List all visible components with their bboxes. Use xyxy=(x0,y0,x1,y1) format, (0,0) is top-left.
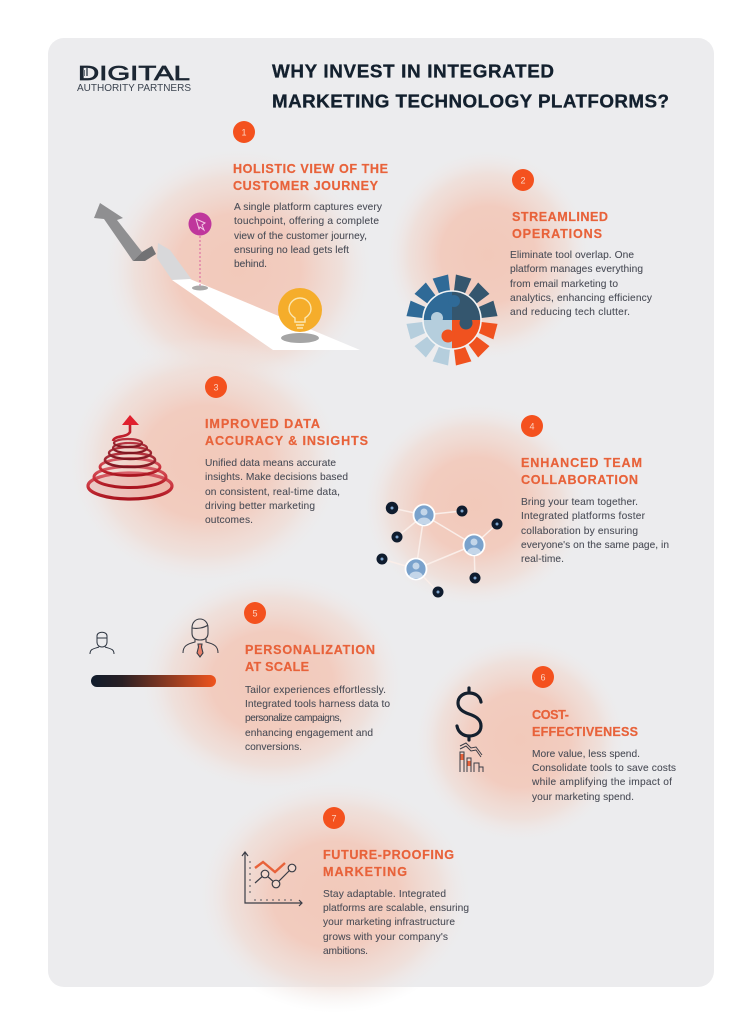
section 2: streamlined operations xyxy=(406,169,653,366)
title: WHY INVEST IN INTEGRATED xyxy=(272,60,554,82)
heading 2: OPERATIONS xyxy=(512,227,602,241)
icon: falling chart xyxy=(460,743,483,772)
icon: dollar sign xyxy=(457,688,481,740)
body 4: real-time. xyxy=(521,554,564,565)
heading 7: MARKETING xyxy=(323,865,407,879)
heading 1: CUSTOMER JOURNEY xyxy=(233,179,379,193)
body 5: enhancing engagement and xyxy=(245,728,373,739)
body 7: Stay adaptable. Integrated xyxy=(323,889,446,900)
heading 2 xyxy=(512,210,608,241)
body 4: Integrated platforms foster xyxy=(521,511,646,522)
icon: journey road with arrow, pin and bulb xyxy=(94,203,360,350)
body 4: collaboration by ensuring xyxy=(521,526,638,537)
icon: large person with tie xyxy=(183,619,218,657)
body 2 xyxy=(510,250,653,318)
body 2: Eliminate tool overlap. One xyxy=(510,250,634,261)
body 5 xyxy=(245,685,390,753)
logo xyxy=(77,62,191,94)
section 7: future proofing xyxy=(242,807,469,957)
body 3 xyxy=(205,458,348,526)
section 3: data accuracy xyxy=(88,376,368,526)
glow backgrounds xyxy=(65,145,628,1013)
heading 7 xyxy=(323,848,454,879)
heading 2: STREAMLINED xyxy=(512,210,608,224)
body 3: outcomes. xyxy=(205,515,253,526)
badge 5 xyxy=(244,602,266,624)
heading 5 xyxy=(245,643,375,674)
body 6: while amplifying the impact of xyxy=(531,777,672,788)
badge 1 xyxy=(233,121,255,143)
body 7 xyxy=(323,889,469,957)
heading 6: EFFECTIVENESS xyxy=(532,725,638,739)
logo: DIGITAL xyxy=(78,62,190,85)
body 7: ambitions. xyxy=(323,946,368,957)
heading 3: ACCURACY & INSIGHTS xyxy=(205,434,368,448)
badge 6 xyxy=(532,666,554,688)
heading 1: HOLISTIC VIEW OF THE xyxy=(233,162,388,176)
body 3: driving better marketing xyxy=(205,501,315,512)
badge 2: 2 xyxy=(520,176,526,186)
body 2: platform manages everything xyxy=(510,264,643,275)
body 1: A single platform captures every xyxy=(234,202,383,213)
body 1: view of the customer journey, xyxy=(234,231,367,242)
title: MARKETING TECHNOLOGY PLATFORMS? xyxy=(272,90,669,112)
body 1: behind. xyxy=(234,259,267,270)
body 1: ensuring no lead gets left xyxy=(234,245,349,256)
badge 5: 5 xyxy=(252,608,258,618)
title xyxy=(272,60,669,112)
body 5: personalize campaigns, xyxy=(245,713,342,724)
badge 6: 6 xyxy=(540,672,546,682)
heading 5: AT SCALE xyxy=(245,660,309,674)
gradient bar xyxy=(91,675,216,687)
badge 3 xyxy=(205,376,227,398)
badge 7 xyxy=(323,807,345,829)
logo: AUTHORITY PARTNERS xyxy=(77,82,191,94)
badge 1: 1 xyxy=(241,128,247,138)
heading 7: FUTURE-PROOFING xyxy=(323,848,454,862)
body 5: conversions. xyxy=(245,742,302,753)
body 4 xyxy=(521,497,669,565)
body 6: More value, less spend. xyxy=(532,749,640,760)
icon: people network xyxy=(376,502,502,598)
icon: puzzle gear xyxy=(406,274,498,366)
icon: line chart xyxy=(242,852,302,906)
icon: small person xyxy=(90,632,114,654)
body 3: Unified data means accurate xyxy=(205,458,336,469)
badge 2 xyxy=(512,169,534,191)
heading 4: ENHANCED TEAM xyxy=(521,456,642,470)
body 7: platforms are scalable, ensuring xyxy=(323,903,469,914)
badge 4 xyxy=(521,415,543,437)
heading 4 xyxy=(521,456,642,487)
heading 4: COLLABORATION xyxy=(521,473,638,487)
body 6 xyxy=(531,749,676,803)
body 2: and reducing tech clutter. xyxy=(510,307,630,318)
section 1: holistic view xyxy=(94,121,388,350)
body 5: Integrated tools harness data to xyxy=(245,699,390,710)
badge 7: 7 xyxy=(331,814,337,824)
section 6: cost effectiveness xyxy=(457,666,676,803)
body 7: grows with your company's xyxy=(323,932,448,943)
badge 4: 4 xyxy=(529,422,535,432)
body 7: your marketing infrastructure xyxy=(323,917,455,928)
body 2: analytics, enhancing efficiency xyxy=(510,293,653,304)
heading 6: COST- xyxy=(532,708,569,722)
section 4: team collaboration xyxy=(376,415,669,598)
body 4: Bring your team together. xyxy=(521,497,638,508)
heading 3: IMPROVED DATA xyxy=(205,417,320,431)
heading 5: PERSONALIZATION xyxy=(245,643,375,657)
heading 6 xyxy=(532,708,638,739)
section 5: personalization xyxy=(90,602,390,753)
body 3: on consistent, real-time data, xyxy=(205,487,340,498)
body 1 xyxy=(234,202,383,270)
heading 1 xyxy=(233,162,388,193)
body 1: touchpoint, offering a complete xyxy=(234,216,379,227)
heading 3 xyxy=(205,417,368,448)
body 6: Consolidate tools to save costs xyxy=(532,763,676,774)
body 4: everyone's on the same page, in xyxy=(521,540,669,551)
body 2: from email marketing to xyxy=(510,279,618,290)
badge 3: 3 xyxy=(213,382,219,392)
icon: red spiral cone with arrow xyxy=(88,415,172,499)
body 5: Tailor experiences effortlessly. xyxy=(245,685,386,696)
body 6: your marketing spend. xyxy=(532,792,634,803)
body 3: insights. Make decisions based xyxy=(205,472,348,483)
